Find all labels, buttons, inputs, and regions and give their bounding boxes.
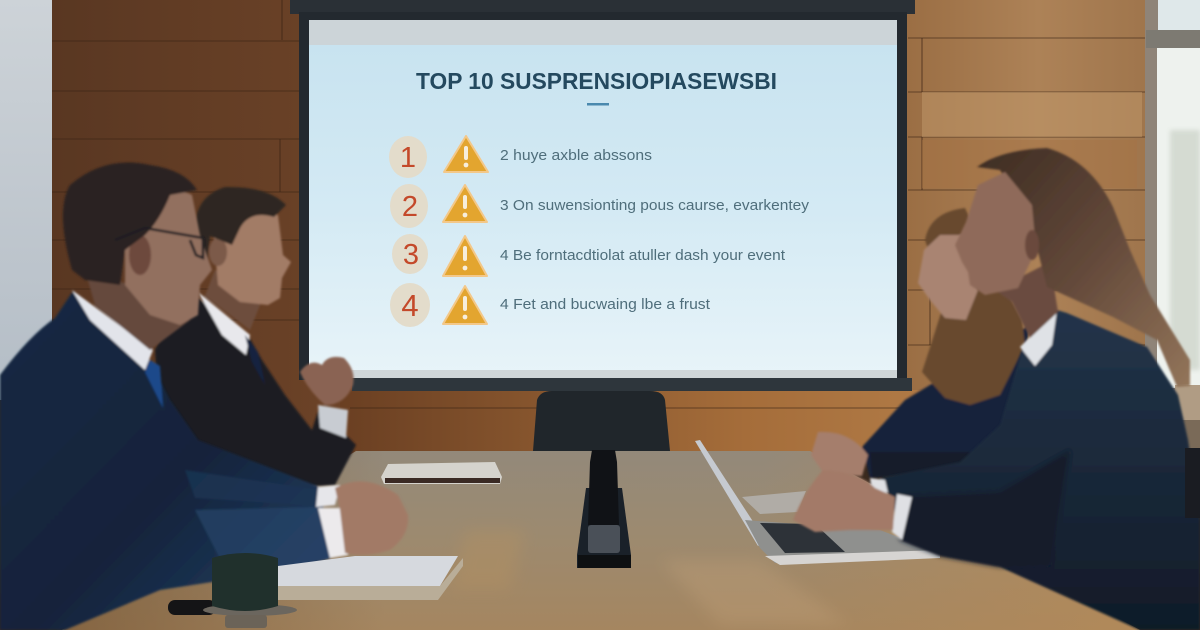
glasses	[115, 228, 203, 258]
notebook at far left of table	[381, 462, 502, 484]
slide list row 2	[390, 184, 810, 228]
slide list row 2: 3 On suwensionting pous caurse, evarkentey	[500, 197, 810, 214]
laptop and paper	[695, 440, 940, 565]
clasped hands	[811, 432, 868, 476]
face	[918, 235, 978, 320]
slide list row 3: 4 Be forntacdtiolat atuller dash your event	[500, 247, 786, 264]
face	[125, 192, 212, 325]
ear	[129, 235, 151, 275]
hands on keyboard	[793, 470, 895, 532]
slide title: TOP 10 SUSPRENSIOPIASEWSBI	[416, 68, 777, 94]
slide list row 4	[390, 283, 711, 327]
wrist cuff back hand	[870, 478, 888, 493]
sleeve highlight	[185, 470, 320, 506]
neck	[205, 270, 262, 330]
slide list row 3: 3	[403, 239, 419, 271]
face	[955, 172, 1036, 295]
mug and phone	[168, 553, 297, 628]
paper	[742, 491, 806, 514]
shirt cuffs	[316, 485, 340, 507]
slide list row 3	[392, 234, 786, 276]
suit	[155, 298, 356, 495]
notebook in front	[278, 556, 463, 600]
centre conference device	[577, 450, 631, 568]
shirt cuff	[892, 494, 912, 540]
chair behind the woman	[1185, 448, 1200, 518]
face	[212, 215, 291, 305]
projector screen	[290, 0, 915, 391]
suit	[0, 291, 332, 630]
slide list row 4: 4 Fet and bucwaing lbe a frust	[500, 296, 711, 313]
conference table	[62, 451, 1140, 630]
hair	[922, 208, 1025, 405]
screen housing	[290, 0, 915, 14]
woman in front	[793, 148, 1200, 630]
suit	[880, 310, 1200, 630]
tie	[145, 360, 163, 408]
laptop screen	[695, 440, 765, 546]
suit	[862, 325, 1030, 478]
front sleeve	[900, 450, 1070, 567]
collar	[72, 290, 153, 370]
neck	[995, 262, 1058, 338]
ear	[1025, 230, 1039, 260]
slide list row 1	[389, 136, 652, 178]
collar	[1020, 310, 1057, 366]
slide list row 4: 4	[401, 288, 419, 323]
man in front, navy suit	[0, 162, 408, 630]
woman in back	[811, 208, 1030, 478]
hair	[977, 148, 1190, 387]
window on the right	[1145, 0, 1200, 450]
cuff and raised hand	[318, 405, 348, 438]
slide list row 1: 2 huye axble abssons	[500, 147, 652, 164]
collar and tie	[198, 292, 250, 355]
hair	[63, 162, 197, 285]
wood panel wall	[52, 0, 1150, 460]
neck	[85, 270, 190, 350]
empty chair	[533, 391, 670, 451]
laptop base	[745, 520, 940, 563]
left white wall	[0, 0, 53, 400]
sleeve	[870, 452, 970, 478]
clasped hands	[335, 481, 408, 555]
ear	[209, 238, 227, 266]
slide list row 1: 1	[400, 142, 416, 174]
hair	[195, 187, 286, 268]
slide list row 2: 2	[402, 191, 418, 223]
man in back, dark suit	[155, 187, 356, 495]
